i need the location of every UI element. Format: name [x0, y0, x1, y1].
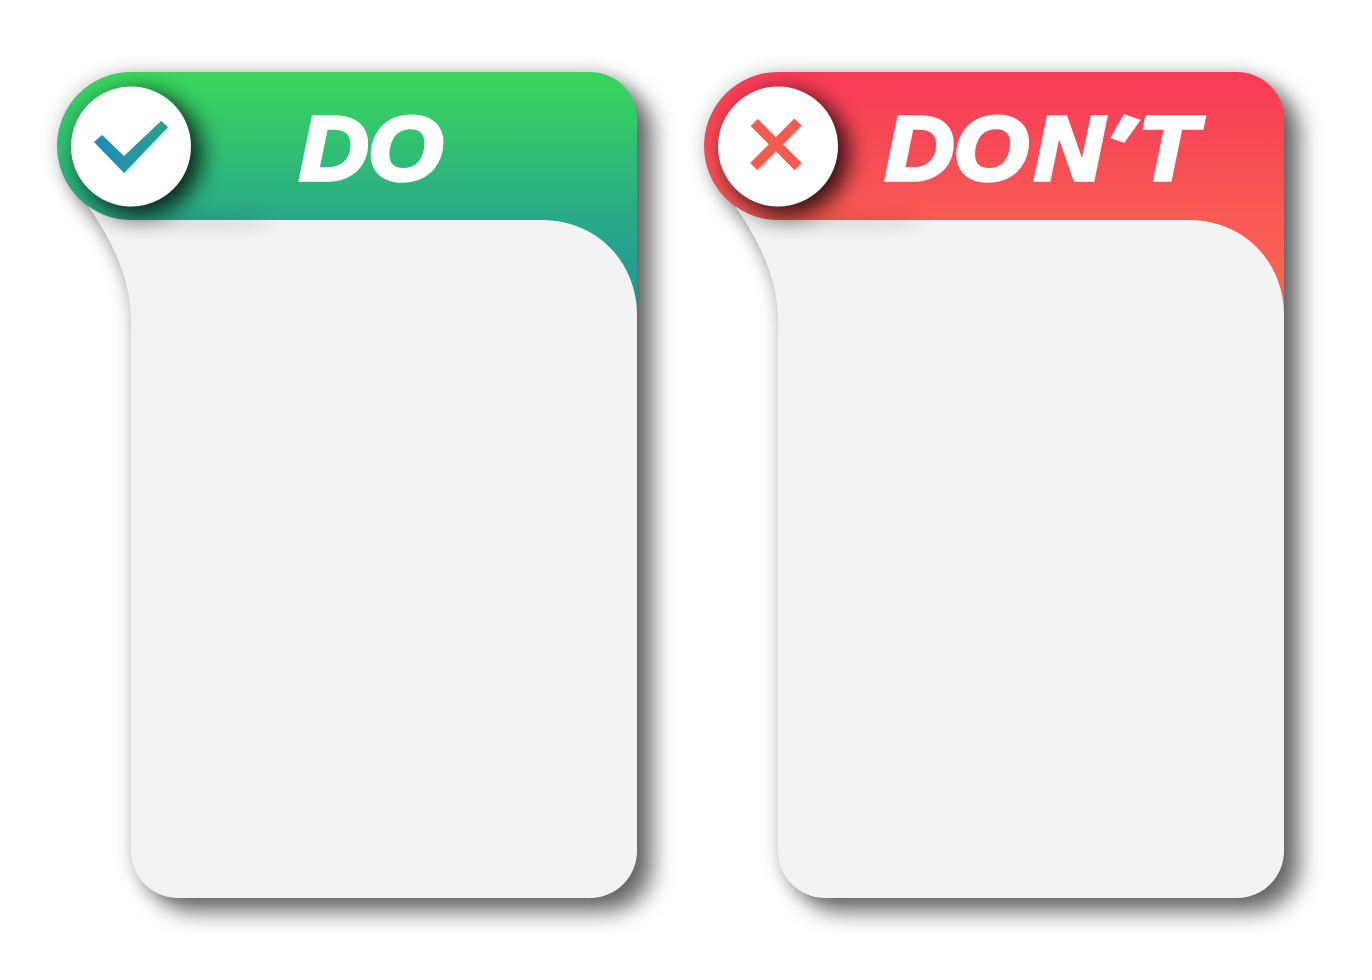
content area: don't — [735, 206, 1284, 898]
panel: do — [57, 72, 637, 898]
content area: do — [88, 206, 637, 898]
card shadow: do — [57, 72, 637, 898]
header band: don't — [704, 72, 1284, 330]
header band: do — [57, 72, 637, 330]
panel: don't — [704, 72, 1284, 898]
icon shadow: don't — [725, 92, 927, 229]
icon: cross in circle — [718, 86, 838, 206]
heading: do: DO — [299, 98, 443, 199]
heading: don't: DON'T — [885, 94, 1204, 199]
card shadow: don't — [704, 72, 1284, 898]
icon shadow: do — [78, 92, 280, 229]
icon: check mark in circle — [71, 86, 191, 206]
